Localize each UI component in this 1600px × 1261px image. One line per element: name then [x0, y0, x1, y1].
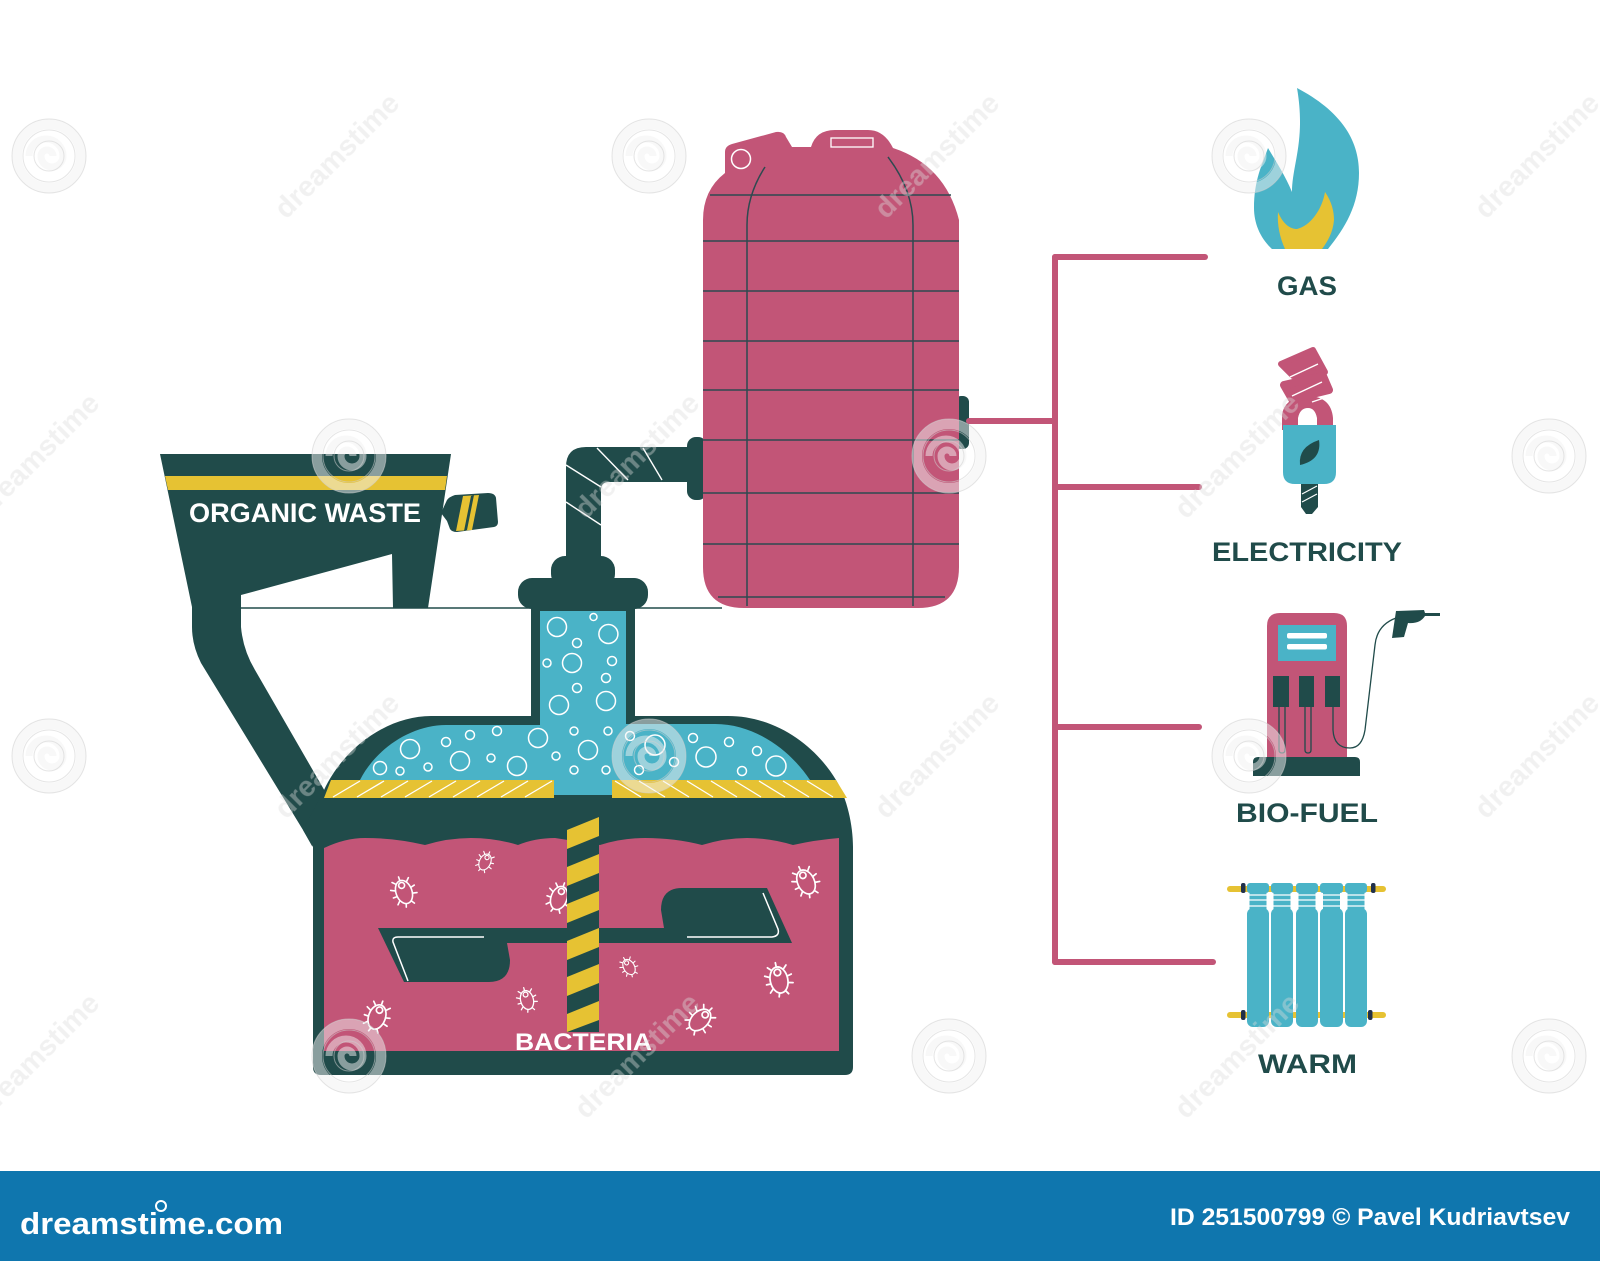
label: organic waste: ORGANIC WASTE	[189, 498, 421, 528]
label: warm: WARM	[1258, 1049, 1357, 1079]
thin baseline	[241, 607, 722, 609]
label: electricity: ELECTRICITY	[1212, 537, 1402, 567]
watermark text: dreamstime	[568, 987, 706, 1125]
label: bacteria: BACTERIA	[515, 1029, 652, 1056]
watermark text: dreamstime	[568, 387, 706, 525]
gas storage tank	[703, 130, 969, 608]
distribution pipes to outputs	[969, 257, 1213, 962]
pink slurry with wavy surface	[324, 838, 839, 1051]
watermark text: dreamstime	[868, 87, 1006, 225]
watermark text: dreamstime	[1168, 387, 1306, 525]
footer logo: dreamstime.com: dreamstime.com	[20, 1206, 283, 1241]
hopper handle	[441, 493, 498, 532]
footer credit: ID 251500799 © Pavel Kudriavtsev	[1170, 1204, 1571, 1231]
gas pipe from digester to gas tank	[566, 437, 707, 570]
label: gas: GAS	[1277, 271, 1337, 301]
digester tank body	[303, 556, 853, 1075]
hopper and chute: organic waste	[160, 454, 451, 846]
yellow hatched floor right	[612, 780, 847, 798]
gas dome with bubbles	[360, 611, 810, 795]
footer bar	[0, 1171, 1600, 1261]
watermark text: dreamstime	[868, 687, 1006, 825]
icon: bio-fuel pump	[1253, 610, 1440, 776]
icon: warm radiator	[1227, 883, 1386, 1027]
yellow hatched floor left	[324, 780, 554, 798]
icon: electricity bulb	[1281, 350, 1336, 514]
watermark spirals	[12, 119, 1586, 1093]
label: bio-fuel: BIO-FUEL	[1236, 798, 1378, 828]
watermark text: dreamstime	[268, 687, 406, 825]
watermark text: dreamstime	[268, 87, 406, 225]
icon: gas flame	[1254, 88, 1359, 249]
mixer blades	[378, 888, 792, 982]
watermark text: dreamstime	[1168, 987, 1306, 1125]
mixer shaft with hazard stripes	[567, 817, 599, 1032]
bacteria icons	[360, 848, 824, 1040]
